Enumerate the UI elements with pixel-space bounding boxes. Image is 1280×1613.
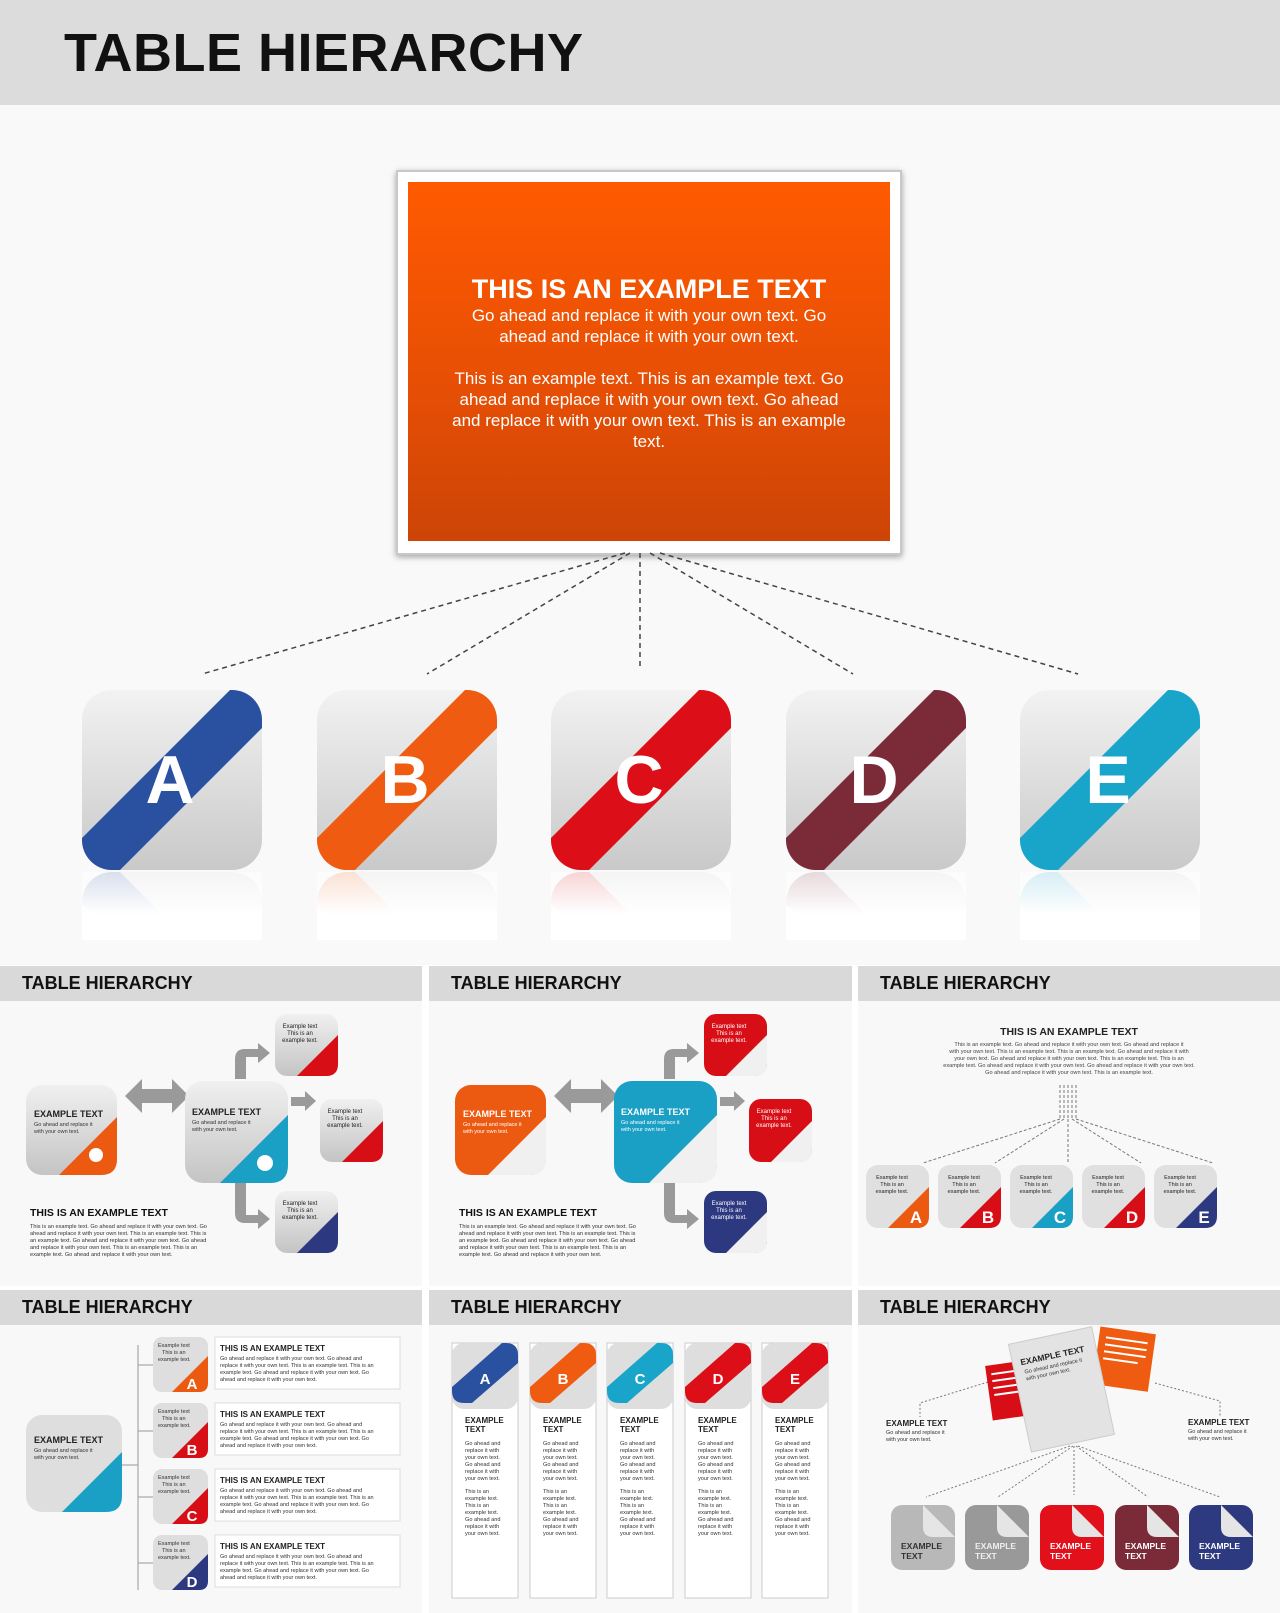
letter tiles — [82, 690, 1200, 900]
panel 5 columns: Go ahead and — [775, 1462, 810, 1468]
panel 5 columns: replace it with — [775, 1524, 809, 1530]
panel 5 columns: This is an — [620, 1503, 644, 1509]
tile C — [551, 690, 731, 900]
panel 5 columns: replace it with — [543, 1469, 577, 1475]
panel 3 diagram — [866, 1026, 1217, 1228]
panel 5 columns: replace it with — [620, 1448, 654, 1454]
panel 1 diagram: example text. — [327, 1123, 363, 1129]
panel 5 columns: Go ahead and — [543, 1441, 578, 1447]
panel 5 columns: EXAMPLE — [698, 1416, 737, 1425]
panel 5 columns: replace it with — [775, 1448, 809, 1454]
panel 4 diagram: B — [187, 1442, 198, 1459]
panel 5 columns: example text. — [543, 1496, 577, 1502]
panel 1 diagram: This is an — [287, 1031, 313, 1037]
panel 4 diagram: Go ahead and replace it with your own text. Go ahead and — [220, 1422, 362, 1428]
panel 5 columns: replace it with — [465, 1469, 499, 1475]
header band — [0, 0, 1280, 105]
panel 5 columns: This is an — [543, 1489, 567, 1495]
panel 5 columns: This is an — [698, 1489, 722, 1495]
tile E — [1020, 690, 1200, 900]
panel 4 diagram: This is an — [162, 1350, 186, 1356]
panel 3 diagram: example text. — [1020, 1189, 1053, 1195]
panel 5 columns: replace it with — [620, 1524, 654, 1530]
panel 6 diagram: EXAMPLE TEXT — [1019, 1344, 1086, 1367]
panel 3 diagram: This is an example text. Go ahead and replace it with your own text. Go ahead and replace it — [954, 1042, 1184, 1048]
main orange box — [396, 170, 902, 555]
panel 4 diagram: This is an — [162, 1548, 186, 1554]
panel 5 columns: replace it with — [543, 1448, 577, 1454]
panel 2 diagram: This is an — [716, 1031, 742, 1037]
panel 2 diagram: example text. Go ahead and replace it with your own text. — [459, 1252, 602, 1258]
panel 5 columns: your own text. — [698, 1531, 733, 1537]
panel 4 diagram: example text. Go ahead and replace it with your own text. Go — [220, 1502, 369, 1508]
panel 3 diagram: B — [982, 1208, 994, 1227]
panel 6 diagram: EXAMPLE — [1125, 1541, 1166, 1551]
panel 5 columns: This is an — [465, 1489, 489, 1495]
panel 1 diagram: Example text — [283, 1201, 318, 1207]
panel 4 diagram: ahead and replace it with your own text. — [220, 1509, 317, 1515]
panel 4 diagram: THIS IS AN EXAMPLE TEXT — [220, 1476, 325, 1485]
panel 5 columns: TEXT — [465, 1425, 486, 1434]
panel 6 header: TABLE HIERARCHY — [880, 1297, 1051, 1317]
panel 6 diagram: EXAMPLE TEXT — [1188, 1418, 1249, 1427]
panel 4 diagram: ahead and replace it with your own text. — [220, 1377, 317, 1383]
tile C: C — [614, 742, 664, 818]
panel 5 columns: Go ahead and — [620, 1517, 655, 1523]
panel 5 columns: your own text. — [543, 1476, 578, 1482]
panel 4 diagram: THIS IS AN EXAMPLE TEXT — [220, 1542, 325, 1551]
panel 5 columns — [452, 1342, 828, 1598]
panel 1 diagram: Go ahead and replace it — [34, 1122, 93, 1128]
panel 5 — [429, 1290, 852, 1598]
panel 6 diagram: EXAMPLE — [901, 1541, 942, 1551]
panel 4 diagram: example text. — [158, 1357, 191, 1363]
panel 3 diagram: Go ahead and replace it with your own text. This is an example text. — [985, 1070, 1153, 1076]
panel 6 diagram: TEXT — [1125, 1551, 1148, 1561]
panel 6 diagram: Go ahead and replace it — [1188, 1429, 1247, 1435]
panel 5 columns: Go ahead and — [465, 1517, 500, 1523]
panel 3 diagram: E — [1198, 1208, 1210, 1227]
panel 2 diagram: example text. — [711, 1215, 747, 1221]
panel 5 columns: EXAMPLE — [620, 1416, 659, 1425]
panel 3 diagram: This is an — [1096, 1182, 1120, 1188]
panel 5 columns: your own text. — [620, 1455, 655, 1461]
panel 4 diagram: A — [187, 1376, 198, 1393]
panel 5 columns: Go ahead and — [620, 1462, 655, 1468]
panel 5 columns: B — [558, 1371, 569, 1388]
panel 5 columns: replace it with — [620, 1469, 654, 1475]
panel 4 diagram: Go ahead and replace it with your own text. Go ahead and — [220, 1356, 362, 1362]
panel 6 diagram: EXAMPLE — [1199, 1541, 1240, 1551]
panel 5 columns: C — [635, 1371, 646, 1388]
panel 5 columns: example text. — [620, 1510, 654, 1516]
panel 4 diagram: EXAMPLE TEXT — [34, 1435, 104, 1445]
panel 1 diagram: ahead and replace it with your own text. This is an example text. This is — [30, 1231, 207, 1237]
panel 2 diagram: This is an — [716, 1208, 742, 1214]
panel 5 columns: This is an — [698, 1503, 722, 1509]
panel 2 diagram: This is an example text. Go ahead and replace it with your own text. Go — [459, 1224, 636, 1230]
panel 5 columns: example text. — [465, 1496, 499, 1502]
panel 5 columns: your own text. — [775, 1476, 810, 1482]
panel 2 diagram: example text. — [711, 1038, 747, 1044]
panel 5 columns: your own text. — [698, 1455, 733, 1461]
panel 4 diagram: ahead and replace it with your own text. — [220, 1443, 317, 1449]
tile B: B — [380, 742, 430, 818]
panel 4 diagram: Go ahead and replace it with your own text. Go ahead and — [220, 1488, 362, 1494]
panel 3 diagram: C — [1054, 1208, 1066, 1227]
panel 1 diagram — [26, 1014, 383, 1258]
panel 1 diagram: with your own text. — [33, 1129, 80, 1135]
main background — [0, 105, 1280, 965]
panel 3 diagram: This is an — [880, 1182, 904, 1188]
panel 6 diagram: EXAMPLE TEXT — [886, 1419, 947, 1428]
panel 3 diagram: example text. — [1164, 1189, 1197, 1195]
panel 5 columns: replace it with — [465, 1524, 499, 1530]
panel 6 diagram: TEXT — [1050, 1551, 1073, 1561]
panel 6 diagram: TEXT — [901, 1551, 924, 1561]
panel 6 diagram: with your own text. — [1187, 1436, 1234, 1442]
panel 2 diagram: Example text — [712, 1024, 747, 1030]
panel 4 diagram: example text. — [158, 1555, 191, 1561]
panel 3 diagram: example text. — [948, 1189, 981, 1195]
panel 1 diagram: an example text. Go ahead and replace it with your own text. Go ahead — [30, 1238, 206, 1244]
panel 5 columns: example text. — [543, 1510, 577, 1516]
panel 3 diagram: This is an — [1168, 1182, 1192, 1188]
panel 5 columns: replace it with — [698, 1524, 732, 1530]
main body text: Go ahead and replace it with your own text. Go ahead and replace it with your own text. — [472, 306, 826, 346]
panel 4 diagram: replace it with your own text. This is an example text. This is an — [220, 1429, 374, 1435]
panel 5 columns: Go ahead and — [775, 1517, 810, 1523]
panel 5 columns: A — [480, 1371, 491, 1388]
panel 4 diagram: Go ahead and replace it with your own text. Go ahead and — [220, 1554, 362, 1560]
panel 6 diagram: Go ahead and replace it — [886, 1430, 945, 1436]
panel 1 diagram: with your own text. — [191, 1127, 238, 1133]
panel 1 — [0, 966, 422, 1258]
panel 5 columns: replace it with — [698, 1448, 732, 1454]
panel 5 columns: your own text. — [543, 1531, 578, 1537]
panel 4 diagram: example text. Go ahead and replace it with your own text. Go — [220, 1568, 369, 1574]
panel 3 header: TABLE HIERARCHY — [880, 973, 1051, 993]
panel 4 diagram: THIS IS AN EXAMPLE TEXT — [220, 1344, 325, 1353]
panel 1 diagram: Example text — [283, 1024, 318, 1030]
panel 3 diagram: Example text — [1164, 1175, 1196, 1181]
tile D: D — [849, 742, 899, 818]
dashed connectors — [204, 552, 1078, 675]
panel 3 diagram: example text. — [1092, 1189, 1125, 1195]
panel 5 header: TABLE HIERARCHY — [451, 1297, 622, 1317]
panel 5 columns: This is an — [465, 1503, 489, 1509]
panel 5 columns: This is an — [775, 1503, 799, 1509]
panel 4 diagram: example text. — [158, 1489, 191, 1495]
panel 3 diagram: D — [1126, 1208, 1138, 1227]
panel 3 diagram: example text. Go ahead and replace it with your own text. Go ahead and replace it with your own text. — [943, 1063, 1195, 1069]
panel 1 diagram: EXAMPLE TEXT — [34, 1109, 104, 1119]
panel 1 diagram: example text. — [282, 1215, 318, 1221]
panel 6 diagram: TEXT — [1199, 1551, 1222, 1561]
panel 3 diagram: Example text — [876, 1175, 908, 1181]
panel 5 columns: Go ahead and — [543, 1517, 578, 1523]
panel 4 header: TABLE HIERARCHY — [22, 1297, 193, 1317]
panel 3 — [858, 966, 1280, 1228]
panel 5 columns: This is an — [620, 1489, 644, 1495]
panel 4 diagram: Example text — [158, 1409, 190, 1415]
panel 2 header — [429, 966, 852, 1001]
panel 2 diagram: an example text. Go ahead and replace it with your own text. Go ahead — [459, 1238, 635, 1244]
panel 4 diagram: replace it with your own text. This is an example text. This is an — [220, 1363, 374, 1369]
panel 2 diagram: with your own text. — [620, 1127, 667, 1133]
panel 4 diagram: replace it with your own text. This is an example text. This is an — [220, 1561, 374, 1567]
main body text: This is an example text. This is an example text. Go ahead and replace it with your own text. Go ahead and replace it with your own text. This is an example text. — [452, 369, 846, 451]
main heading: THIS IS AN EXAMPLE TEXT — [472, 274, 826, 304]
panel 5 columns: EXAMPLE — [465, 1416, 504, 1425]
panel 5 columns: Go ahead and — [543, 1462, 578, 1468]
panel 1 diagram: THIS IS AN EXAMPLE TEXT — [30, 1207, 168, 1219]
panel 3 diagram: with your own text. This is an example text. This is an example text. Go ahead and replace it with — [948, 1049, 1189, 1055]
panel 5 columns: example text. — [775, 1510, 809, 1516]
panel 6 diagram — [885, 1326, 1253, 1570]
panel 5 columns: your own text. — [620, 1476, 655, 1482]
panel 4 diagram: example text. Go ahead and replace it with your own text. Go — [220, 1436, 369, 1442]
tile B — [317, 690, 497, 900]
tile A — [82, 690, 262, 898]
panel 1 diagram: Go ahead and replace it — [192, 1120, 251, 1126]
panel 4 diagram: THIS IS AN EXAMPLE TEXT — [220, 1410, 325, 1419]
tile E: E — [1085, 742, 1131, 818]
panel 4 diagram: Example text — [158, 1475, 190, 1481]
panel 3 diagram: THIS IS AN EXAMPLE TEXT — [1000, 1026, 1139, 1038]
panel 4 diagram: example text. Go ahead and replace it with your own text. Go — [220, 1370, 369, 1376]
panel 4 diagram: Go ahead and replace it — [34, 1448, 93, 1454]
panel 4 diagram: This is an — [162, 1416, 186, 1422]
panel 5 columns: TEXT — [543, 1425, 564, 1434]
panel 4 — [0, 1290, 422, 1591]
panel 2 diagram: THIS IS AN EXAMPLE TEXT — [459, 1207, 597, 1219]
panel 2 header: TABLE HIERARCHY — [451, 973, 622, 993]
panel 3 diagram: Example text — [948, 1175, 980, 1181]
tile D — [786, 690, 966, 898]
panel 5 columns: TEXT — [698, 1425, 719, 1434]
panel 3 diagram: Example text — [1020, 1175, 1052, 1181]
panel 5 columns: EXAMPLE — [543, 1416, 582, 1425]
panel 5 columns: Go ahead and — [775, 1441, 810, 1447]
panel 5 columns: example text. — [698, 1510, 732, 1516]
panel 1 diagram: example text. — [282, 1038, 318, 1044]
panel 2 diagram: This is an — [761, 1116, 787, 1122]
panel 4 diagram: with your own text. — [33, 1455, 80, 1461]
panel 5 columns: Go ahead and — [698, 1517, 733, 1523]
panel 5 columns: example text. — [620, 1496, 654, 1502]
panel 3 diagram: example text. — [876, 1189, 909, 1195]
panel 6 header — [858, 1290, 1280, 1325]
panel 2 diagram: and replace it with your own text. This is an example text. This is an — [459, 1245, 626, 1251]
panel 5 columns: E — [790, 1371, 800, 1388]
panel 1 header — [0, 966, 422, 1001]
panel 1 diagram: This is an — [332, 1116, 358, 1122]
panel 5 columns: Go ahead and — [698, 1441, 733, 1447]
panel 1 diagram: This is an — [287, 1208, 313, 1214]
panel 3 diagram: This is an — [1024, 1182, 1048, 1188]
panel 5 columns: Go ahead and — [620, 1441, 655, 1447]
panel 5 columns: This is an — [775, 1489, 799, 1495]
panel 4 header — [0, 1290, 422, 1325]
panel 2 diagram: Example text — [712, 1201, 747, 1207]
panel 5 columns: Go ahead and — [465, 1441, 500, 1447]
panel 2 diagram: with your own text. — [462, 1129, 509, 1135]
panel 5 columns: your own text. — [620, 1531, 655, 1537]
panel 2 diagram: Example text — [757, 1109, 792, 1115]
panel 2 diagram — [455, 1014, 812, 1258]
panel 4 diagram: C — [187, 1508, 198, 1525]
panel 5 columns: your own text. — [465, 1455, 500, 1461]
panel 1 diagram: EXAMPLE TEXT — [192, 1107, 262, 1117]
panel 5 columns: your own text. — [698, 1476, 733, 1482]
panel 5 columns: EXAMPLE — [775, 1416, 814, 1425]
title: TABLE HIERARCHY — [64, 23, 584, 83]
panel 6 diagram: with your own text. — [1025, 1367, 1072, 1383]
panel 4 diagram: replace it with your own text. This is an example text. This is an — [220, 1495, 374, 1501]
panel 4 diagram: ahead and replace it with your own text. — [220, 1575, 317, 1581]
panel 2 diagram: Go ahead and replace it — [463, 1122, 522, 1128]
panel 5 columns: TEXT — [620, 1425, 641, 1434]
panel 5 columns: replace it with — [543, 1524, 577, 1530]
panel 4 diagram: D — [187, 1574, 198, 1591]
panel 5 columns: example text. — [465, 1510, 499, 1516]
panel 5 columns: your own text. — [543, 1455, 578, 1461]
panel 5 columns: This is an — [543, 1503, 567, 1509]
panel 6 diagram: Go ahead and replace it — [1024, 1357, 1083, 1376]
panel 2 diagram: EXAMPLE TEXT — [621, 1107, 691, 1117]
panel 3 diagram: This is an — [952, 1182, 976, 1188]
panel 5 columns: your own text. — [775, 1531, 810, 1537]
panel 6 diagram: EXAMPLE — [1050, 1541, 1091, 1551]
panel 6 diagram: EXAMPLE — [975, 1541, 1016, 1551]
panel 3 diagram: A — [910, 1208, 922, 1227]
panel 5 columns: example text. — [775, 1496, 809, 1502]
panel 4 diagram: This is an — [162, 1482, 186, 1488]
panel 4 diagram: Example text — [158, 1343, 190, 1349]
main body text — [452, 306, 846, 451]
panel 1 diagram: Example text — [328, 1109, 363, 1115]
tile A: A — [145, 742, 195, 818]
panel 6 diagram: with your own text. — [885, 1437, 932, 1443]
panel 1 header: TABLE HIERARCHY — [22, 973, 193, 993]
panel 2 — [429, 966, 852, 1258]
panel 5 columns: D — [713, 1371, 724, 1388]
panel 1 diagram: This is an example text. Go ahead and replace it with your own text. Go — [30, 1224, 207, 1230]
panel 5 columns: Go ahead and — [465, 1462, 500, 1468]
panel 2 diagram: example text. — [756, 1123, 792, 1129]
panel 6 — [858, 1290, 1280, 1570]
panel 5 columns: your own text. — [465, 1476, 500, 1482]
panel 5 columns: Go ahead and — [698, 1462, 733, 1468]
panel 2 diagram: Go ahead and replace it — [621, 1120, 680, 1126]
panel 4 diagram: example text. — [158, 1423, 191, 1429]
panel 5 columns: your own text. — [775, 1455, 810, 1461]
panel 1 diagram: and replace it with your own text. This is an example text. This is an — [30, 1245, 197, 1251]
panel 6 diagram: TEXT — [975, 1551, 998, 1561]
panel 3 diagram: your own text. Go ahead and replace it with your own text. This is an example text. This is an — [954, 1056, 1184, 1062]
panel 5 columns: example text. — [698, 1496, 732, 1502]
panel 5 columns: TEXT — [775, 1425, 796, 1434]
panel 5 columns: your own text. — [465, 1531, 500, 1537]
panel 1 diagram: example text. Go ahead and replace it with your own text. — [30, 1252, 173, 1258]
panel 2 diagram: ahead and replace it with your own text. This is an example text. This is — [459, 1231, 636, 1237]
panel 3 diagram: Example text — [1092, 1175, 1124, 1181]
panel 3 header — [858, 966, 1280, 1001]
panel 5 columns: replace it with — [775, 1469, 809, 1475]
panel 5 columns: replace it with — [698, 1469, 732, 1475]
panel 5 header — [429, 1290, 852, 1325]
panel 5 columns: replace it with — [465, 1448, 499, 1454]
panel 4 diagram: Example text — [158, 1541, 190, 1547]
panel 4 diagram — [26, 1336, 400, 1591]
panel 2 diagram: EXAMPLE TEXT — [463, 1109, 533, 1119]
